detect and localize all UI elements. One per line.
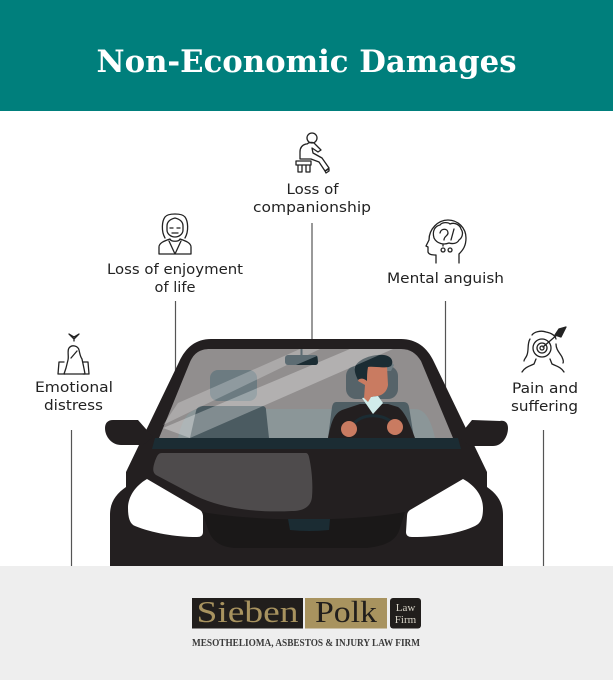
car body <box>110 339 503 566</box>
icon: person in distress sitting <box>58 334 89 374</box>
label: pain and suffering: Pain and <box>512 381 578 397</box>
icon: head with brain and question marks <box>426 220 466 263</box>
rear bench <box>178 409 435 438</box>
icon: person sitting on bench <box>296 133 329 173</box>
grille <box>202 512 405 548</box>
label: loss of enjoyment of life <box>107 262 244 296</box>
connector lines <box>72 223 544 566</box>
side mirror left <box>105 420 153 445</box>
side mirror right <box>458 420 508 446</box>
icon: woman with target and arrow <box>522 327 566 372</box>
driver seat back <box>328 402 414 438</box>
car illustration <box>105 339 508 566</box>
label: pain and suffering: suffering <box>511 399 578 415</box>
label: pain and suffering <box>511 381 578 415</box>
logo: Law Firm: Firm <box>395 614 417 626</box>
label: loss of companionship: companionship <box>253 200 371 216</box>
logo tagline: MESOTHELIOMA, ASBESTOS & INJURY LAW FIRM <box>192 638 421 649</box>
headlight left <box>128 479 203 537</box>
logo <box>192 594 421 649</box>
headlight right <box>406 479 483 537</box>
hood highlight <box>153 453 312 511</box>
logo: Polk <box>305 594 387 629</box>
driver headrest <box>346 366 398 399</box>
driver collar <box>362 396 383 414</box>
steering wheel <box>352 416 395 427</box>
logo: Law Firm: Law <box>396 602 415 614</box>
left seat <box>190 406 269 438</box>
footer band <box>0 566 613 680</box>
light streaks <box>163 349 320 425</box>
label: loss of enjoyment of life: Loss of enjoyment <box>107 262 244 278</box>
windshield <box>159 349 453 438</box>
label: loss of companionship <box>253 182 371 216</box>
driver torso <box>328 404 415 438</box>
logo: Polk: Polk <box>315 594 378 629</box>
logo: Law Firm <box>390 598 421 628</box>
header banner <box>0 0 613 111</box>
dashboard band <box>152 438 461 449</box>
logo: Sieben: Sieben <box>196 594 299 629</box>
label: loss of enjoyment of life: of life <box>154 280 196 296</box>
label: mental anguish: Mental anguish <box>387 271 504 287</box>
driver face <box>358 366 388 402</box>
icon: crying woman <box>159 214 191 254</box>
label: emotional distress <box>35 380 113 414</box>
title: Non-Economic Damages <box>96 44 516 80</box>
driver hair <box>355 355 392 381</box>
driver hands <box>341 421 357 437</box>
left headrest <box>210 370 257 401</box>
label: emotional distress: Emotional <box>35 380 113 396</box>
label: loss of companionship: Loss of <box>286 182 340 198</box>
rear-view mirror <box>285 349 318 365</box>
label: emotional distress: distress <box>44 398 103 414</box>
license plate <box>288 519 330 531</box>
